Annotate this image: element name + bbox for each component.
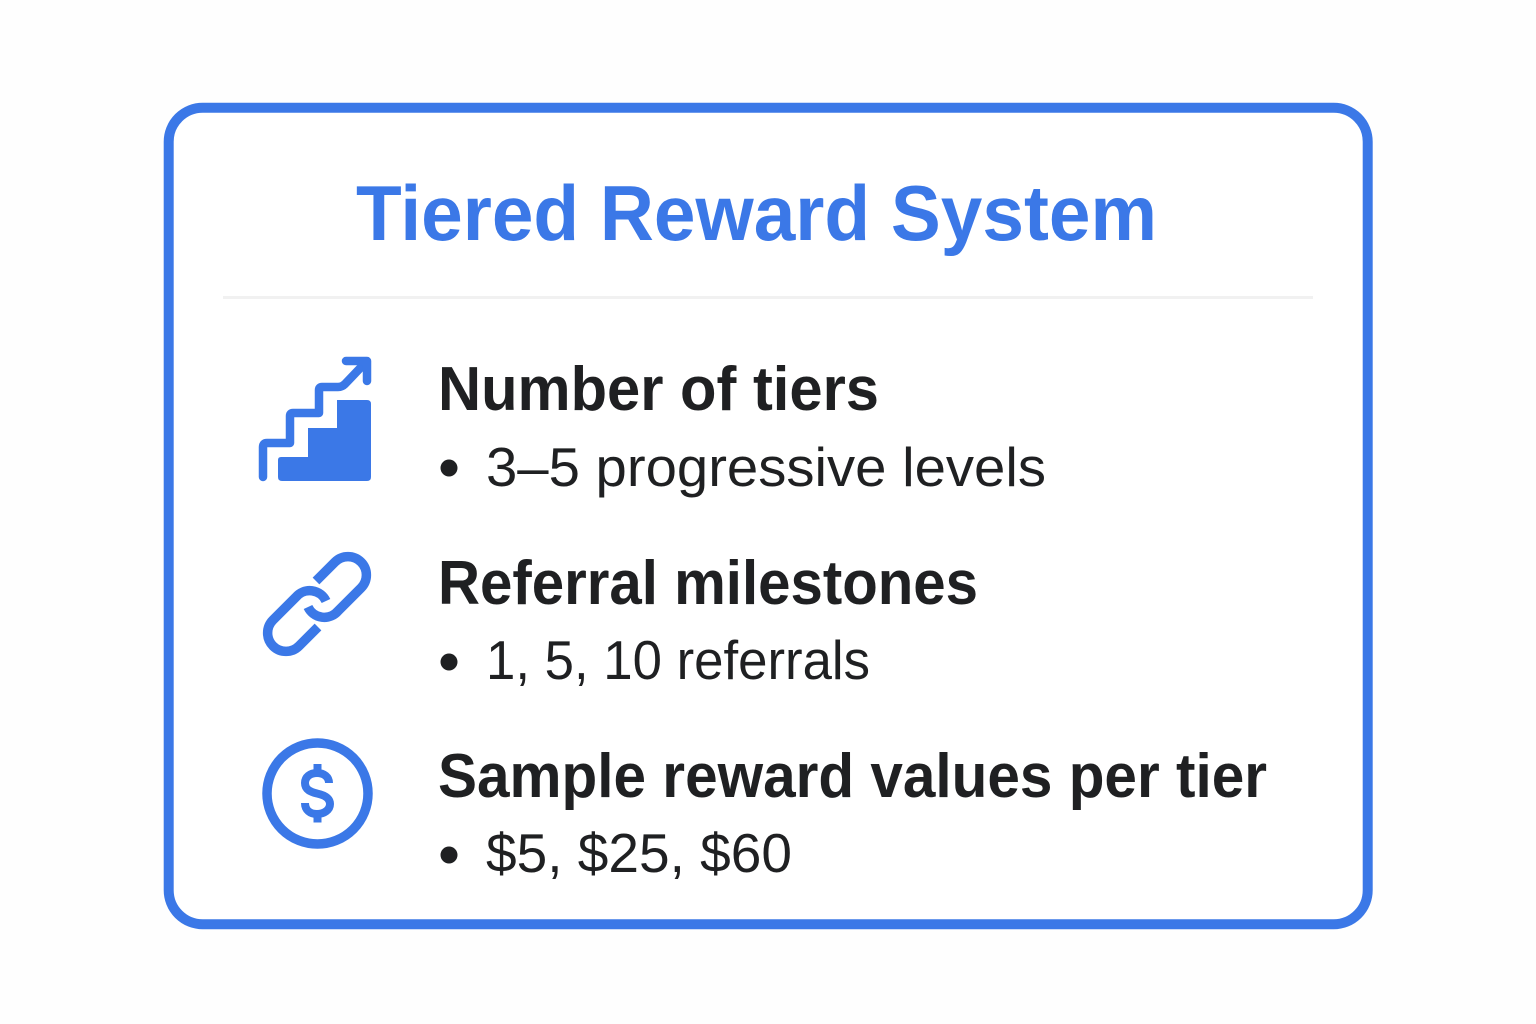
heading: number of tiers: Number of tiers	[438, 355, 879, 424]
panel: tiered reward card	[169, 108, 1368, 924]
heading: referral milestones: Referral milestones	[438, 549, 978, 618]
icon: stairs with rising arrow	[263, 361, 371, 481]
bullet: reward values: $5, $25, $60	[486, 822, 792, 884]
heading: sample reward values per tier: Sample reward values per tier	[438, 742, 1267, 811]
icon: dollar coin	[267, 743, 368, 844]
bullet: referrals: 1, 5, 10 referrals	[486, 629, 870, 691]
bullet: progressive levels: 3–5 progressive levels	[486, 436, 1046, 498]
row: referral milestones	[268, 549, 978, 691]
row: sample reward values	[267, 742, 1267, 884]
title: Tiered Reward System	[356, 169, 1157, 257]
icon: chain link	[268, 557, 366, 651]
row: number of tiers	[263, 355, 1046, 498]
